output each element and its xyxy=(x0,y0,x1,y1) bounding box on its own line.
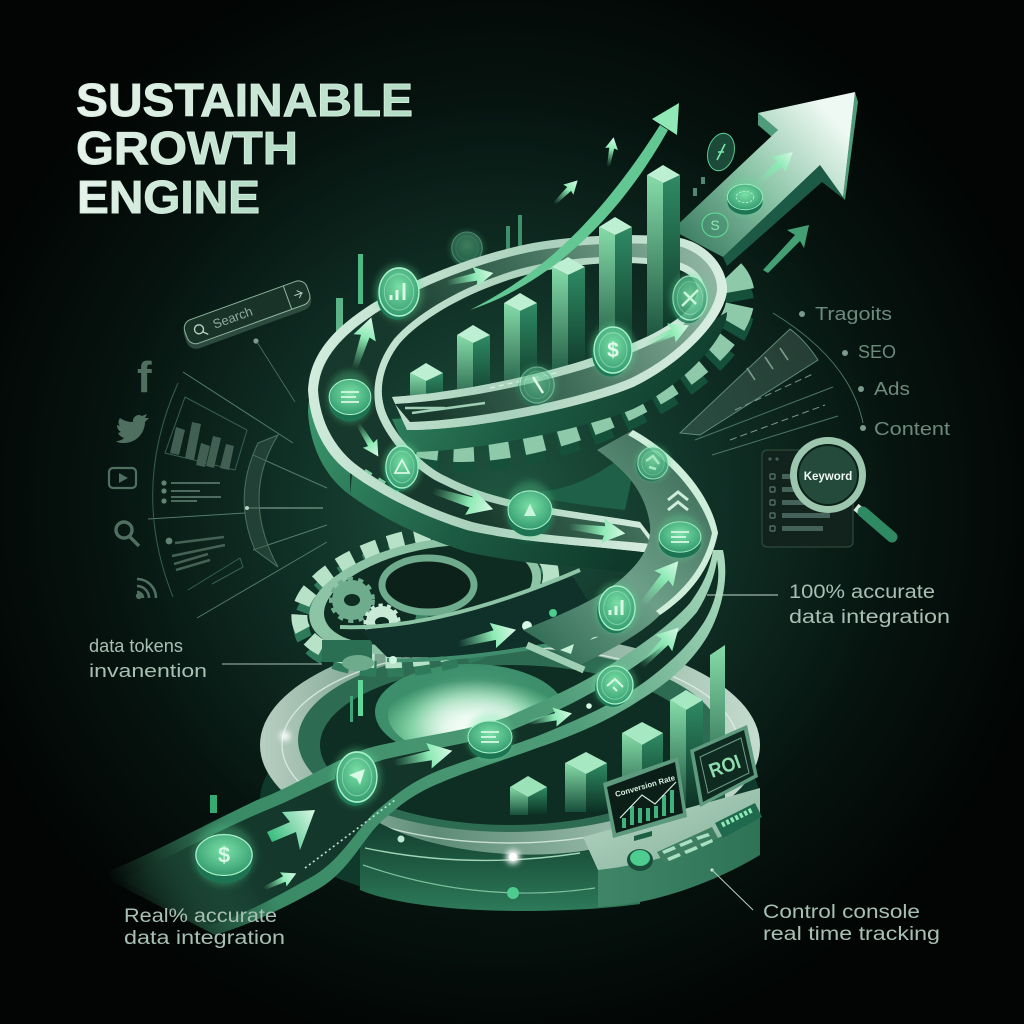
road: light middle band xyxy=(523,430,718,670)
title: SUSTAINABLE xyxy=(76,74,413,126)
coin: cross token xyxy=(669,273,711,323)
coin: outline on shaft: S xyxy=(710,217,720,233)
arrow: big road arrow xyxy=(267,810,315,850)
coin: dollar token xyxy=(193,824,255,886)
callout: data tokens: invanention xyxy=(89,661,207,681)
callout: data tokens xyxy=(89,636,322,681)
road markers and tokens on top loop xyxy=(327,263,711,546)
gear behind top loop xyxy=(419,273,741,510)
callout: real accurate: Real% accurate xyxy=(124,906,277,927)
road: upper spiral back xyxy=(308,235,727,555)
bottom tiers xyxy=(360,810,640,911)
coin: floating xyxy=(704,130,738,174)
callout: accurate data xyxy=(707,582,950,628)
panel: channels fan xyxy=(680,313,863,455)
icon: search xyxy=(116,522,139,546)
coin: mid road token xyxy=(506,481,554,539)
keyword magnifier panel xyxy=(762,437,892,547)
callout: control console xyxy=(710,868,940,945)
channel labels: Tragoits xyxy=(815,304,892,324)
title xyxy=(76,74,413,223)
floating accents xyxy=(210,136,620,813)
road: middle dark section xyxy=(340,570,600,664)
coin: list token right xyxy=(657,514,703,560)
coin: star token xyxy=(333,748,381,806)
coin: chart token xyxy=(595,583,639,633)
big growth arrow xyxy=(672,92,858,273)
title: GROWTH xyxy=(76,122,298,174)
coin: dollar token: $ xyxy=(218,843,230,868)
callout: accurate data: data integration xyxy=(789,607,950,628)
fan bar chart xyxy=(170,422,234,470)
callout: real accurate: data integration xyxy=(124,928,285,949)
coin: outline on shaft xyxy=(702,213,728,237)
channel labels: Content xyxy=(874,419,950,439)
keyword magnifier panel: Keyword xyxy=(804,471,852,483)
coin: list token left xyxy=(327,371,373,423)
search bar: Search xyxy=(211,303,255,332)
callout: data tokens: data tokens xyxy=(89,636,183,656)
coin: glass token xyxy=(516,364,558,406)
screen: ROI: ROI xyxy=(706,751,744,783)
arrow: small right xyxy=(763,225,809,273)
road: lower spiral xyxy=(100,550,725,935)
callout: real accurate xyxy=(124,906,285,949)
coin: dollar token front: $ xyxy=(607,339,619,362)
console controls xyxy=(627,803,762,871)
control console xyxy=(583,725,762,907)
channel labels: Ads xyxy=(874,379,910,399)
icon: facebook: f xyxy=(137,353,152,402)
icon: youtube xyxy=(109,468,136,488)
coin: refresh token xyxy=(635,445,671,481)
coin: triangle token xyxy=(382,443,422,491)
search bar xyxy=(180,278,314,402)
panel: social analytics fan xyxy=(148,372,327,618)
base platform xyxy=(260,633,760,908)
lower gear ring xyxy=(288,511,565,690)
screen: ROI xyxy=(690,725,758,807)
curved growth arrow xyxy=(470,103,679,310)
central glowing well xyxy=(350,664,565,760)
screen: conversion rate xyxy=(603,757,687,841)
base bars xyxy=(510,645,725,815)
channel labels: SEO xyxy=(858,342,896,362)
callout: accurate data: 100% accurate xyxy=(789,582,935,603)
coin: transfer token xyxy=(593,663,637,707)
coin: chart token top xyxy=(375,264,423,320)
callout: control console: Control console xyxy=(763,902,920,923)
title: ENGINE xyxy=(77,171,260,223)
coin: dollar token front xyxy=(590,324,636,376)
icon: twitter bird xyxy=(116,414,149,443)
road: upper spiral wall xyxy=(308,312,727,577)
screen: conversion rate: Conversion Rate xyxy=(614,773,677,799)
channel labels xyxy=(799,304,950,439)
road: upper spiral front xyxy=(308,235,727,555)
coin: list token xyxy=(466,713,514,761)
fan list xyxy=(171,483,225,570)
small gears xyxy=(332,558,474,639)
coin: on arrow shaft xyxy=(726,178,764,216)
icon: rss xyxy=(137,579,156,598)
callout: control console: real time tracking xyxy=(763,924,940,945)
rising bar chart xyxy=(410,165,680,415)
